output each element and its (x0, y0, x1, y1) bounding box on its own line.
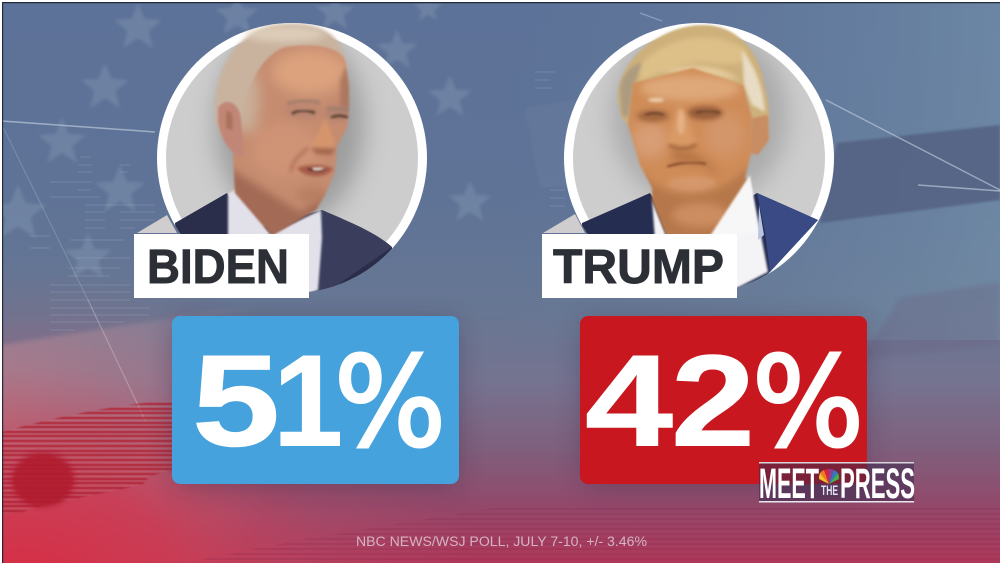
forehead highlight (640, 75, 740, 101)
cheek glow (258, 128, 312, 173)
background halftone stripes, blue (30, 72, 565, 330)
nasolabial shadow (291, 148, 308, 172)
logo: Meet the Press: MEET (759, 460, 819, 508)
portrait: Biden (157, 23, 427, 300)
eyes (292, 110, 348, 118)
eye socket shade (324, 110, 348, 121)
panel: Trump percentage: 2 (671, 328, 755, 474)
head (627, 67, 752, 234)
portrait ring (564, 23, 834, 293)
panel: Biden percentage: 1 (273, 328, 343, 474)
source note: NBC NEWS/WSJ POLL, JULY 7-10, +/- 3.46% (356, 534, 647, 549)
mouth (297, 165, 333, 176)
panel: Trump percentage: 4 (585, 328, 673, 474)
nose (314, 121, 334, 148)
background light streaks (2, 13, 1000, 420)
icon: peacock (819, 469, 839, 484)
neck shadow (234, 168, 320, 234)
panel: Biden percentage: % (334, 331, 446, 475)
panel: Biden percentage (172, 316, 459, 484)
ear (750, 115, 769, 155)
brows (287, 101, 348, 110)
background stars (0, 0, 492, 278)
left cheek (632, 122, 668, 158)
panel: Trump percentage (580, 316, 867, 484)
red stripes band, bottom centre (202, 513, 474, 560)
right cheek (705, 113, 745, 157)
label: BIDEN: BIDEN (147, 241, 289, 294)
chin (668, 176, 716, 192)
panel: Trump percentage: % (752, 331, 864, 475)
mouth (667, 162, 706, 167)
logo: Meet the Press: THE (821, 482, 838, 498)
collar tip over neck (710, 175, 757, 236)
shirt collar (228, 189, 322, 298)
red stripes graphic, lower left (3, 401, 172, 514)
portrait ring (157, 23, 427, 293)
shirt (650, 182, 770, 288)
suit (175, 193, 392, 300)
logo: Meet the Press: PRESS (840, 460, 915, 508)
suit (582, 193, 818, 288)
hair (618, 25, 769, 125)
label tab: Biden (137, 215, 177, 233)
hair (215, 24, 349, 135)
portrait: Trump (564, 23, 834, 300)
neck (648, 169, 746, 234)
chin shade (300, 188, 324, 200)
label tab: Trump (543, 214, 585, 233)
nose (672, 110, 694, 146)
head (232, 44, 350, 234)
eye shadows (637, 110, 669, 122)
upper lip shadow (670, 150, 714, 170)
panel: Biden percentage: 5 (192, 328, 280, 474)
forehead glow (272, 50, 348, 94)
ear (218, 102, 244, 156)
label: TRUMP: TRUMP (553, 241, 724, 294)
right temple wrinkle (338, 67, 350, 108)
